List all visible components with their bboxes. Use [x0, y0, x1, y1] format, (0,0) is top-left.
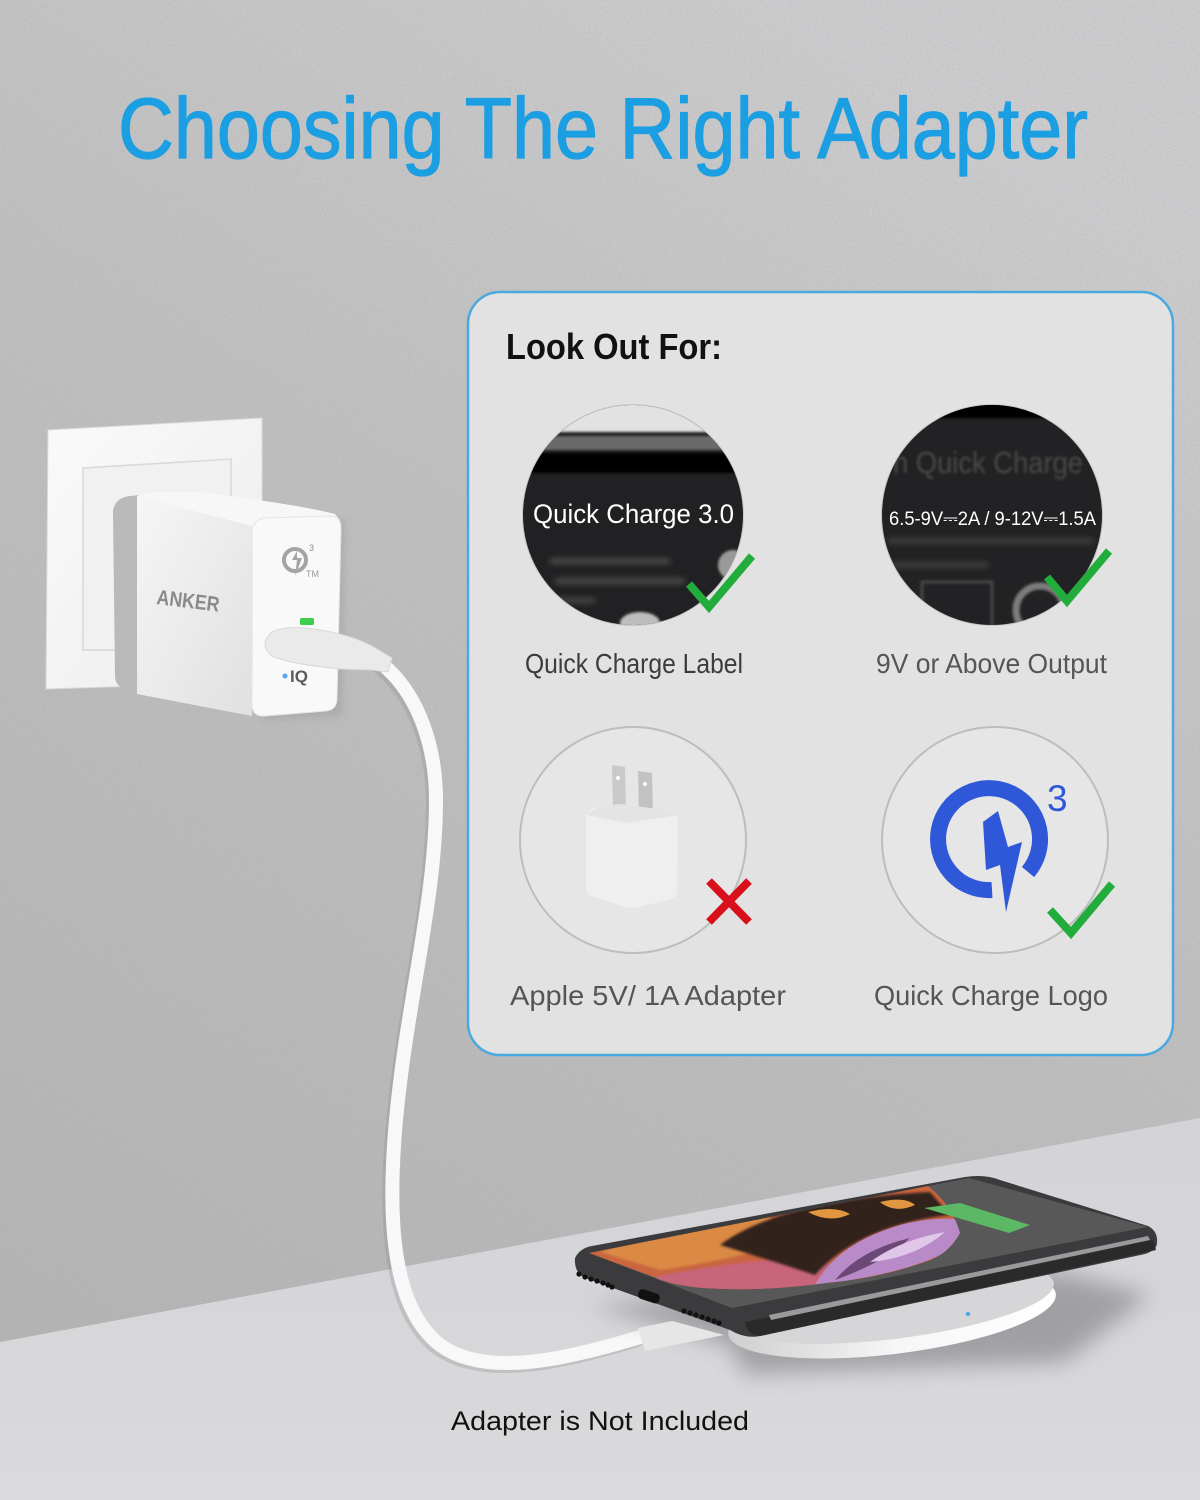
item: output voltage: [870, 390, 1115, 679]
check mark: [689, 556, 752, 607]
footnote: Adapter is Not Included: [451, 1406, 749, 1436]
cable boot at pad: [638, 1321, 724, 1351]
item: quick charge label: Quick Charge 3.0: [533, 499, 734, 529]
icon: quick charge 3 logo: [938, 778, 1068, 912]
brand label: ANKER: [155, 586, 221, 617]
battery indicator: [924, 1203, 1030, 1233]
quick charge mini logo: 3: [309, 543, 314, 553]
smartphone: [575, 1176, 1157, 1337]
cross mark: [709, 881, 749, 922]
panel heading: Look Out For:: [506, 326, 722, 367]
item: output voltage: n Quick Charge: [893, 445, 1083, 480]
caption: Quick Charge Logo: [874, 980, 1108, 1011]
speaker and port holes: [576, 1271, 722, 1326]
floor surface: [0, 1118, 1200, 1500]
caption: 9V or Above Output: [876, 648, 1107, 679]
wallpaper planet: [589, 1186, 960, 1290]
panel: look out for: [468, 292, 1173, 1055]
IQ port label: IQ: [290, 667, 308, 686]
check mark: [1050, 884, 1112, 933]
phone screen: [589, 1178, 1148, 1308]
quick charge mini logo: [284, 543, 319, 579]
wireless charging pad shadow: [590, 1272, 1150, 1374]
icon: small plug adapter: [586, 765, 678, 908]
check mark: [1047, 551, 1109, 601]
wireless charging pad: [723, 1247, 1061, 1374]
item: quick charge label: [522, 404, 755, 679]
icon: quick charge 3 logo: 3: [1047, 778, 1068, 819]
item: apple adapter: [510, 727, 786, 1011]
caption: Quick Charge Label: [525, 648, 743, 679]
item: quick charge logo: [874, 727, 1112, 1011]
USB connector: [265, 628, 392, 672]
item: output voltage: 6.5-9V⎓2A / 9-12V⎓1.5A: [889, 509, 1096, 530]
title: Choosing The Right Adapter: [118, 81, 1088, 177]
charging cable: [379, 664, 640, 1366]
status light: [300, 618, 314, 625]
caption: Apple 5V/ 1A Adapter: [510, 980, 786, 1011]
quick charge mini logo: TM: [306, 569, 319, 579]
wall outlet plate: [46, 418, 262, 689]
wall charger: [113, 492, 345, 720]
